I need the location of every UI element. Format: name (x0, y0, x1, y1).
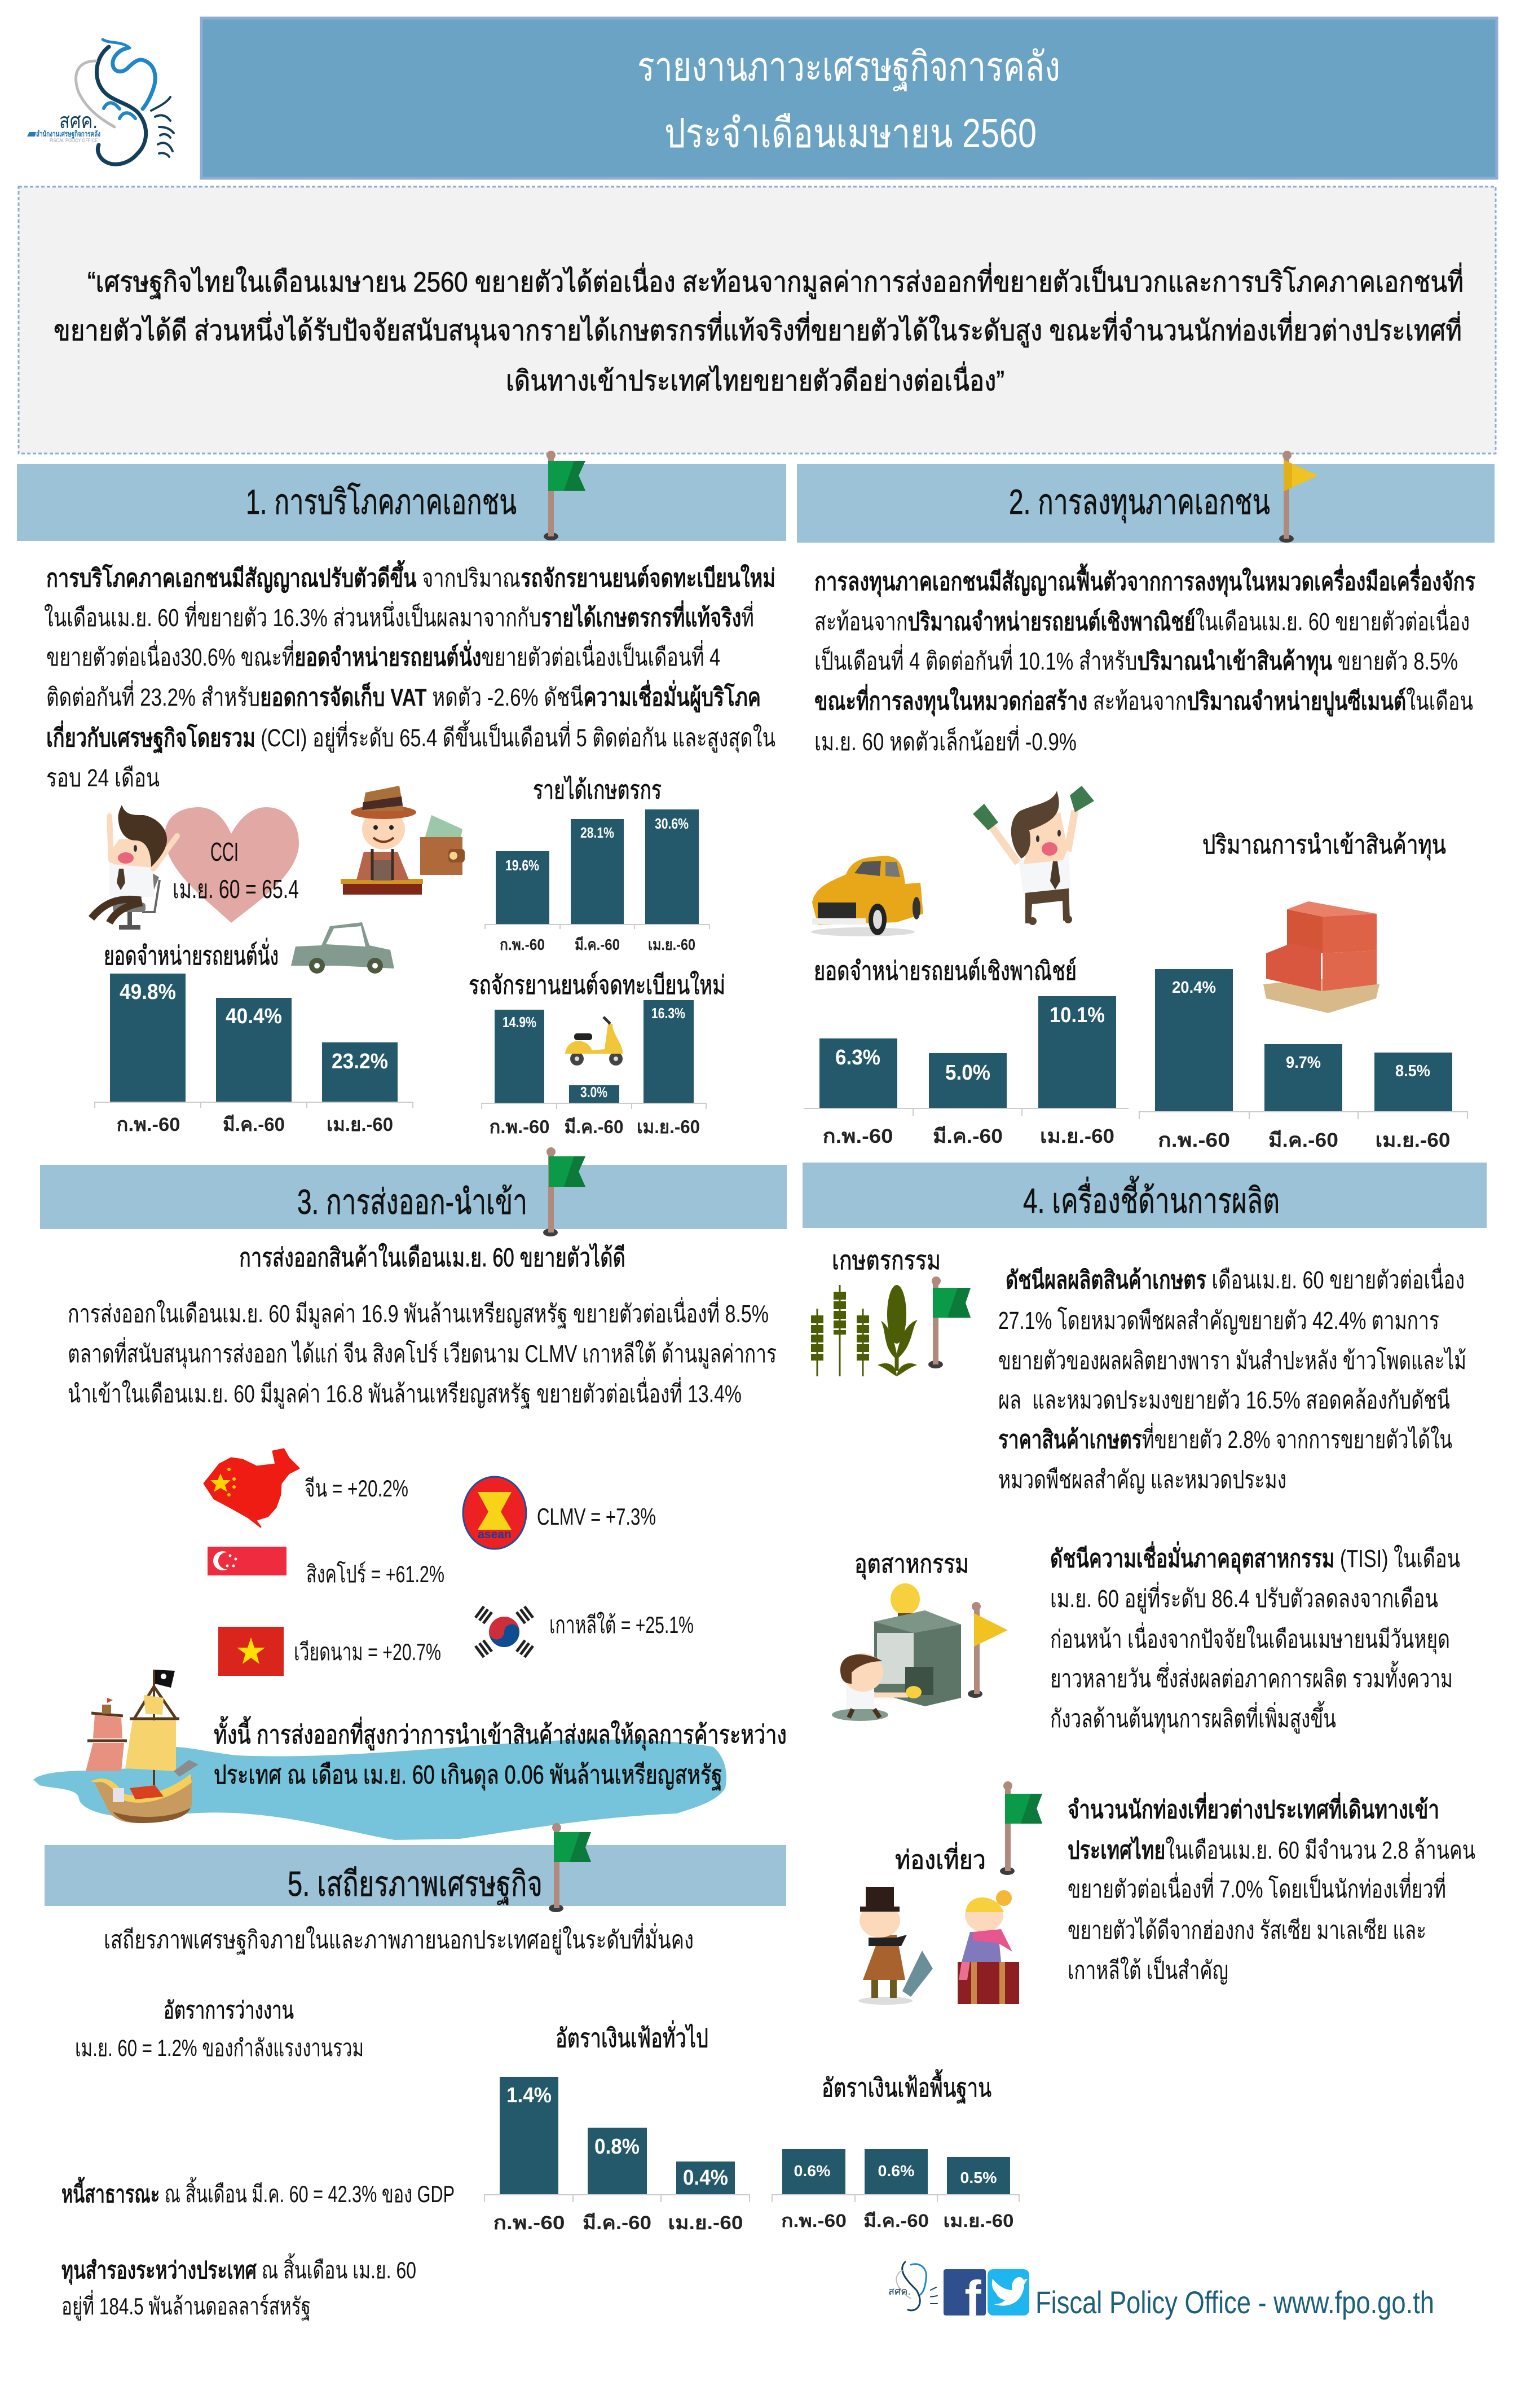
bar chart: core inflation: อัตราเงินเฟ้อพื้นฐาน (822, 2069, 991, 2103)
intro quote panel: เดินทางเข้าประเทศไทยขยายตัวดีอย่างต่อเนื่อง” (506, 362, 1004, 397)
text block: section 1 body: ติดต่อกันที่ 23.2% สำหรับยอดการจัดเก็บ VAT หดตัว -2.6% ดัชนีความเชื่อมั่นผู้บริโภค (46, 680, 761, 712)
bar chart: passenger car sales: ยอดจำหน่ายรถยนต์นั่ง (104, 937, 279, 970)
icon: Twitter (988, 2269, 1029, 2315)
label: Vietnam: เวียดนาม = +20.7% (294, 1639, 441, 1665)
text block: industry body: กังวลด้านต้นทุนการผลิตที่เพิ่มสูงขึ้น (1050, 1701, 1336, 1734)
icon: Facebook (944, 2269, 986, 2326)
bar chart: headline inflation: มี.ค.-60 (583, 2212, 651, 2234)
heading: section 3: 3. การส่งออก-นำเข้า (297, 1183, 527, 1222)
icon: man on chair (91, 805, 177, 930)
text block: agriculture body (998, 1262, 1466, 1494)
bar chart: new motorcycle registrations: 3.0% (580, 1084, 607, 1100)
label: Singapore: สิงคโปร์ = +61.2% (306, 1560, 444, 1587)
panel: section 3 exports and imports (33, 1147, 787, 1840)
icon: green flag 5 (549, 1823, 591, 1912)
logo: Fiscal Policy Office: FISCAL POLICY OFFICE (50, 138, 98, 143)
icon: farmer (341, 786, 423, 895)
bar chart: commercial car sales: เม.ย.-60 (1040, 1125, 1114, 1147)
text block: agriculture body: ดัชนีผลผลิตสินค้าเกษตร เดือนเม.ย. 60 ขยายตัวต่อเนื่อง (1006, 1262, 1465, 1294)
text: unemployment: อัตราการว่างงาน (164, 1997, 294, 2023)
icon: yellow pickup truck (811, 856, 923, 936)
text: international reserves: อยู่ที่ 184.5 พันล้านดอลลาร์สหรัฐ (61, 2290, 311, 2321)
logo: Fiscal Policy Office (27, 39, 174, 164)
icon: wallet (420, 815, 465, 875)
bar chart: commercial car sales: 5.0% (945, 1061, 990, 1085)
panel: section 2 private investment (797, 451, 1495, 1151)
text: international reserves: ทุนสำรองระหว่างประเทศ ณ สิ้นเดือน เม.ย. 60 (61, 2253, 416, 2285)
heading: section 4: 4. เครื่องชี้ด้านการผลิต (1023, 1176, 1280, 1221)
icon: South Korea flag (475, 1606, 533, 1657)
icon: man with money (973, 786, 1094, 925)
text block: section 2 body: เป็นเดือนที่ 4 ติดต่อกันที่ 10.1% สำหรับปริมาณนำเข้าสินค้าทุน ขยายตัว 8.5% (814, 644, 1458, 677)
icon: green flag 3 (543, 1147, 585, 1236)
text block: section 1 body: เกี่ยวกับเศรษฐกิจโดยรวม (CCI) อยู่ที่ระดับ 65.4 ดีขึ้นเป็นเดือนที่ 5 ติดต่อกัน และสูงสุดใน (46, 720, 775, 754)
text block: agriculture body: หมวดพืชผลสำคัญ และหมวดประมง (998, 1466, 1286, 1494)
icon: pirate ship (86, 1670, 199, 1823)
bar chart: passenger car sales: 23.2% (332, 1050, 388, 1073)
text block: section 3 body: การส่งออกในเดือนเม.ย. 60 มีมูลค่า 16.9 พันล้านเหรียญสหรัฐ ขยายตัวต่อเนื่องที่ 8.5% (68, 1296, 769, 1329)
bar chart: capital goods imports: มี.ค.-60 (1268, 1129, 1338, 1151)
text: industry heading: อุตสาหกรรม (854, 1549, 969, 1580)
text: public debt: หนี้สาธารณะ ณ สิ้นเดือน มี.ค. 60 = 42.3% ของ GDP (61, 2176, 455, 2207)
bar chart: farm income: ก.พ.-60 (500, 936, 545, 953)
text block: section 2 body: เม.ย. 60 หดตัวเล็กน้อยที่ -0.9% (814, 724, 1077, 756)
panel: section 4 production indicators (803, 1163, 1487, 2005)
bar chart: new motorcycle registrations: เม.ย.-60 (637, 1116, 700, 1137)
text block: trade balance: ทั้งนี้ การส่งออกที่สูงกว่าการนำเข้าสินค้าส่งผลให้ดุลการค้าระหว่าง (214, 1716, 787, 1751)
bar chart: core inflation: 0.5% (960, 2169, 997, 2186)
bar chart: farm income: มี.ค.-60 (575, 936, 620, 953)
label: South Korea: เกาหลีใต้ = +25.1% (549, 1612, 694, 1638)
text block: section 2 body: ขณะที่การลงทุนในหมวดก่อสร้าง สะท้อนจากปริมาณจำหน่ายปูนซีเมนต์ในเดือน (814, 684, 1473, 717)
footer: logo, social icons, website (888, 2262, 1434, 2326)
text block: section 1 body: รอบ 24 เดือน (46, 764, 160, 792)
icon: boxes on pallet (1263, 901, 1379, 1013)
label: CLMV: CLMV = +7.3% (537, 1503, 656, 1530)
icon: green flag tourism (1000, 1781, 1042, 1875)
panel: section 1 private consumption (17, 451, 786, 1137)
text: international reserves (61, 2253, 416, 2321)
bar chart: capital goods imports (1139, 969, 1467, 1151)
heading: section 1 (17, 464, 786, 541)
bar chart: core inflation (772, 2069, 1019, 2231)
heading: section 2 (797, 464, 1495, 543)
heading: section 1: 1. การบริโภคภาคเอกชน (246, 482, 517, 522)
bar chart: core inflation: เม.ย.-60 (943, 2211, 1014, 2231)
bar chart: new motorcycle registrations: 16.3% (651, 1005, 685, 1022)
text: section 5 subheading: เสถียรภาพเศรษฐกิจภายในและภาพภายนอกประเทศอยู่ในระดับที่มั่นคง (104, 1922, 694, 1955)
bar chart: capital goods imports: เม.ย.-60 (1375, 1129, 1451, 1151)
bar chart: commercial car sales: มี.ค.-60 (933, 1125, 1003, 1147)
icon: China map (204, 1449, 299, 1527)
bar chart: core inflation: ก.พ.-60 (781, 2211, 847, 2231)
heading: section 2: 2. การลงทุนภาคเอกชน (1009, 483, 1270, 523)
icon: green flag 1 (544, 451, 585, 540)
bar chart: headline inflation: 0.8% (594, 2135, 640, 2159)
panel: section 5 economic stability (45, 1823, 1019, 2321)
bar chart: core inflation: 0.6% (794, 2162, 831, 2180)
bar chart: farm income: รายได้เกษตรกร (533, 775, 662, 804)
icon: ASEAN emblem (463, 1477, 526, 1549)
bar chart: headline inflation: 0.4% (683, 2166, 728, 2190)
bar chart: commercial car sales: 6.3% (835, 1046, 880, 1069)
bar chart: farm income: เม.ย.-60 (648, 936, 695, 953)
text block: industry body: ดัชนีความเชื่อมั่นภาคอุตสาหกรรม (TISI) ในเดือน (1050, 1541, 1460, 1574)
text block: section 1 body: ขยายตัวต่อเนื่อง30.6% ขณะที่ยอดจำหน่ายรถยนต์นั่งขยายตัวต่อเนื่องเป็นเดือนที่ 4 (46, 640, 720, 671)
bar chart: farm income (485, 775, 709, 953)
bar chart: passenger car sales: 49.8% (120, 980, 176, 1004)
bar chart: farm income: 19.6% (505, 857, 539, 874)
bar chart: new motorcycle registrations: รถจักรยานยนต์จดทะเบียนใหม่ (469, 970, 725, 1000)
icon: yellow flag 2 (1279, 451, 1318, 543)
bar chart: passenger car sales: 40.4% (226, 1005, 282, 1028)
text block: industry body (1050, 1541, 1460, 1734)
bar chart: new motorcycle registrations (469, 970, 725, 1137)
bar chart: core inflation: มี.ค.-60 (863, 2211, 929, 2231)
text: website: Fiscal Policy Office - www.fpo.go.th (1035, 2284, 1434, 2320)
intro quote panel (19, 187, 1496, 454)
text: unemployment: เม.ย. 60 = 1.2% ของกำลังแรงงานรวม (75, 2035, 364, 2061)
text block: section 3 body (68, 1296, 777, 1409)
icon: Vietnam flag (218, 1627, 284, 1676)
text block: section 3 body: นำเข้าในเดือนเม.ย. 60 มีมูลค่า 16.8 พันล้านเหรียญสหรัฐ ขยายตัวต่อเนื่องที่ 13.4% (68, 1376, 742, 1409)
text block: trade balance (214, 1716, 787, 1791)
bar chart: headline inflation: 1.4% (506, 2084, 552, 2107)
bar chart: passenger car sales: เม.ย.-60 (327, 1114, 393, 1135)
icon: ASEAN emblem: asean (478, 1528, 512, 1541)
bar chart: core inflation: 0.6% (878, 2162, 915, 2180)
text block: section 1 body (44, 560, 775, 792)
text block: tourism body: เกาหลีใต้ เป็นสำคัญ (1068, 1956, 1228, 1984)
icon: wheat and corn (814, 1285, 918, 1376)
bar chart: new motorcycle registrations: 14.9% (503, 1014, 536, 1031)
text: capital goods title: ปริมาณการนำเข้าสินค้าทุน (1202, 830, 1446, 861)
bar chart: capital goods imports: 9.7% (1286, 1054, 1321, 1072)
heading: section 3 (40, 1165, 787, 1229)
label: China: จีน = +20.2% (305, 1475, 408, 1502)
bar chart: farm income: 28.1% (580, 824, 614, 841)
icon: tourist girl (958, 1890, 1019, 2004)
bar chart: capital goods imports: 8.5% (1395, 1062, 1430, 1080)
bar chart: commercial car sales: ก.พ.-60 (822, 1125, 893, 1147)
icon: small logo (888, 2262, 937, 2310)
text block: section 2 body (814, 563, 1475, 756)
bar chart: headline inflation: เม.ย.-60 (668, 2212, 743, 2234)
text: agriculture heading: เกษตรกรรม (832, 1245, 941, 1275)
bar chart: new motorcycle registrations: ก.พ.-60 (490, 1116, 549, 1137)
bar chart: commercial car sales: 10.1% (1050, 1003, 1105, 1027)
bar chart: commercial car sales (804, 956, 1129, 1147)
icon: scooter (565, 1017, 623, 1066)
logo: Fiscal Policy Office: สศค. (59, 109, 98, 133)
text: section 3 subheading: การส่งออกสินค้าในเดือนเม.ย. 60 ขยายตัวได้ดี (239, 1243, 625, 1272)
heading: section 5: 5. เสถียรภาพเศรษฐกิจ (288, 1865, 543, 1905)
text: tourism heading: ท่องเที่ยว (895, 1842, 986, 1874)
heading: section 4 (803, 1163, 1487, 1228)
icon: Singapore flag (208, 1547, 287, 1575)
title banner (201, 18, 1497, 178)
bar chart: headline inflation: อัตราเงินเฟ้อทั่วไป (556, 2020, 708, 2053)
icon: green flag agriculture (928, 1276, 971, 1368)
text: unemployment (75, 1997, 364, 2061)
icon: grey car (291, 922, 394, 974)
bar chart: passenger car sales: มี.ค.-60 (223, 1114, 285, 1135)
bar chart: capital goods imports: 20.4% (1172, 979, 1216, 997)
icon: small logo: สศค. (888, 2286, 910, 2297)
icon: machine with businessman (832, 1583, 961, 1721)
bar chart: passenger car sales (95, 937, 413, 1135)
text block: section 1 body: การบริโภคภาคเอกชนมีสัญญาณปรับตัวดีขึ้น จากปริมาณรถจักรยานยนต์จดทะเบียนใหม่ (46, 560, 775, 593)
text block: trade balance: ประเทศ ณ เดือน เม.ย. 60 เกินดุล 0.06 พันล้านเหรียญสหรัฐ (214, 1760, 722, 1791)
text block: tourism body: จำนวนนักท่องเที่ยวต่างประเทศที่เดินทางเข้า (1068, 1792, 1439, 1824)
logo: Fiscal Policy Office: สำนักงานเศรษฐกิจการคลัง (36, 129, 100, 139)
bar chart: capital goods imports: ก.พ.-60 (1158, 1129, 1230, 1151)
bar chart: new motorcycle registrations: มี.ค.-60 (564, 1116, 624, 1137)
title banner: ประจำเดือนเมษายน 2560 (664, 111, 1037, 156)
bar chart: headline inflation (484, 2020, 750, 2234)
chart element: CCI heart (165, 807, 299, 923)
chart element: CCI heart: เม.ย. 60 = 65.4 (173, 874, 299, 904)
bar chart: headline inflation: ก.พ.-60 (493, 2212, 565, 2234)
bar chart: passenger car sales: ก.พ.-60 (116, 1114, 180, 1135)
shape: sea (33, 1740, 726, 1840)
bar chart: commercial car sales: ยอดจำหน่ายรถยนต์เชิงพาณิชย์ (814, 956, 1077, 985)
icon: Facebook: f (964, 2270, 981, 2326)
title banner: รายงานภาวะเศรษฐกิจการคลัง (637, 45, 1060, 91)
chart element: CCI heart: CCI (210, 837, 239, 866)
text block: tourism body (1068, 1792, 1475, 1984)
text block: section 1 body: ในเดือนเม.ย. 60 ที่ขยายตัว 16.3% ส่วนหนึ่งเป็นผลมาจากกับรายได้เกษตรกรที่แท้จริงที่ (44, 600, 754, 632)
icon: tourist boy (858, 1887, 933, 2005)
bar chart: farm income: 30.6% (655, 815, 689, 832)
text block: section 3 body: ตลาดที่สนับสนุนการส่งออก ได้แก่ จีน สิงคโปร์ เวียดนาม CLMV เกาหลีใต้ ด้านมูลค่าการ (68, 1336, 777, 1369)
icon: yellow flag industry (968, 1602, 1008, 1698)
heading: section 5 (45, 1845, 786, 1906)
